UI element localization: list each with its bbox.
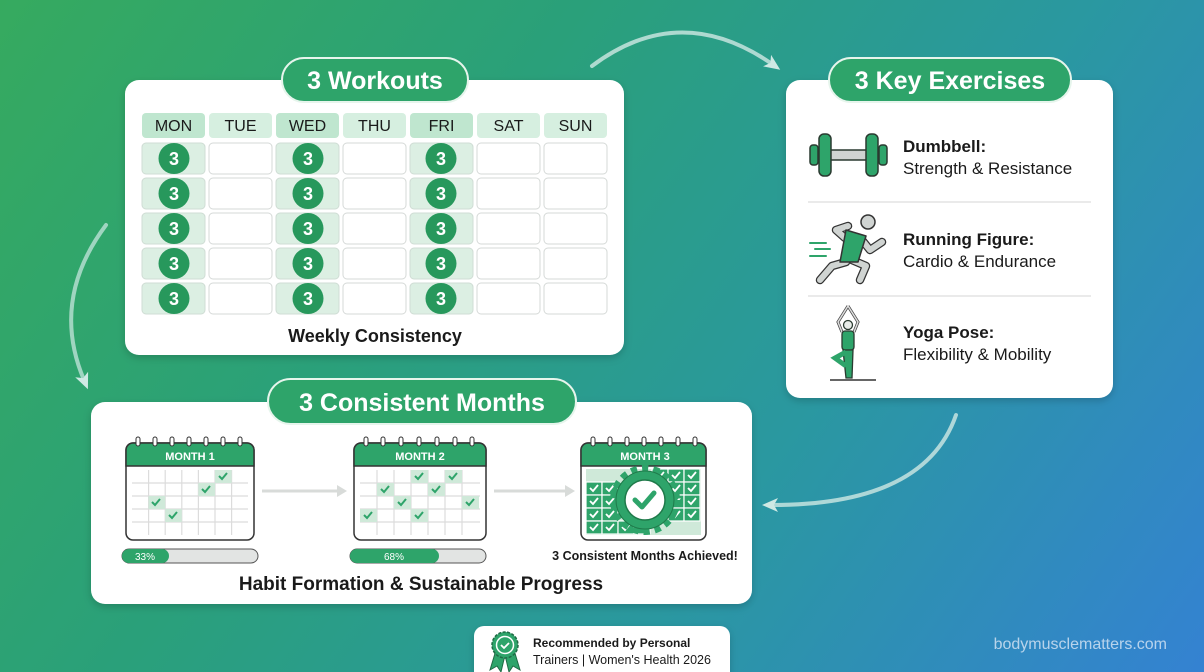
- day headers: SUN: [559, 118, 592, 135]
- weekly grid: [142, 143, 607, 314]
- text: dumbbell: Strength & Resistance: [903, 159, 1072, 178]
- heading: 3 Consistent Months: [268, 379, 576, 424]
- heading: 3 Workouts: 3 Workouts: [307, 67, 443, 95]
- text: running figure: [903, 230, 1056, 271]
- text: yoga pose: [903, 323, 1052, 364]
- text: achieved: 3 Consistent Months Achieved!: [552, 549, 738, 563]
- arrow: right flow: [772, 415, 956, 505]
- text: dumbbell: [903, 137, 1072, 178]
- day headers: MON: [155, 118, 192, 135]
- heading: 3 Key Exercises: [829, 58, 1071, 102]
- weekly grid: 3: [436, 149, 446, 169]
- text: yoga pose: Flexibility & Mobility: [903, 345, 1052, 364]
- heading: 3 Workouts: [282, 58, 468, 102]
- arrow: month2 to month3: [494, 485, 575, 497]
- day headers: [142, 113, 607, 138]
- badge: recommended: [474, 626, 730, 672]
- panel: 3 consistent months: [91, 379, 752, 604]
- calendar: month 1: [126, 437, 254, 540]
- calendar: month 3: [581, 437, 706, 540]
- panel: 3 key exercises: [786, 58, 1113, 398]
- progress bar: 68%: [350, 549, 486, 563]
- day headers: WED: [289, 118, 326, 135]
- heading: 3 Key Exercises: 3 Key Exercises: [855, 67, 1045, 95]
- badge: recommended: Trainers | Women's Health 2026: [533, 653, 711, 667]
- day headers: SAT: [494, 118, 524, 135]
- weekly grid: 3: [303, 149, 313, 169]
- calendar: month 2: MONTH 2: [395, 451, 445, 463]
- watermark: bodymusclematters.com: [994, 636, 1167, 653]
- arrow: top flow: [592, 32, 772, 66]
- icon: award ribbon: [490, 632, 520, 672]
- calendar: month 3: MONTH 3: [620, 451, 670, 463]
- arrow: left flow: [71, 225, 106, 380]
- calendar: month 2: [354, 437, 486, 540]
- text: dumbbell: Dumbbell:: [903, 137, 986, 156]
- day headers: FRI: [429, 118, 454, 135]
- icon: yoga pose: [830, 306, 876, 380]
- progress bar: 33%: [122, 549, 258, 563]
- day headers: TUE: [224, 118, 256, 135]
- progress bar: 33%: 33%: [135, 552, 155, 563]
- icon: running figure: [810, 215, 882, 280]
- weekly grid: 3: [169, 149, 179, 169]
- arrow: month1 to month2: [262, 485, 347, 497]
- badge: recommended: Recommended by Personal: [533, 636, 690, 650]
- icon: dumbbell: [810, 134, 887, 176]
- icon: achievement gear: [614, 469, 676, 531]
- text: yoga pose: Yoga Pose:: [903, 323, 994, 342]
- text: running figure: Cardio & Endurance: [903, 252, 1056, 271]
- day headers: THU: [358, 118, 391, 135]
- progress bar: 68%: 68%: [384, 552, 404, 563]
- calendar: month 1: MONTH 1: [165, 451, 215, 463]
- caption: Weekly Consistency: Weekly Consistency: [288, 326, 462, 346]
- caption: habit formation: Habit Formation & Sustainable Progress: [239, 574, 603, 595]
- heading: 3 Consistent Months: 3 Consistent Months: [299, 389, 545, 417]
- text: running figure: Running Figure:: [903, 230, 1034, 249]
- panel: 3 workouts: [125, 58, 624, 355]
